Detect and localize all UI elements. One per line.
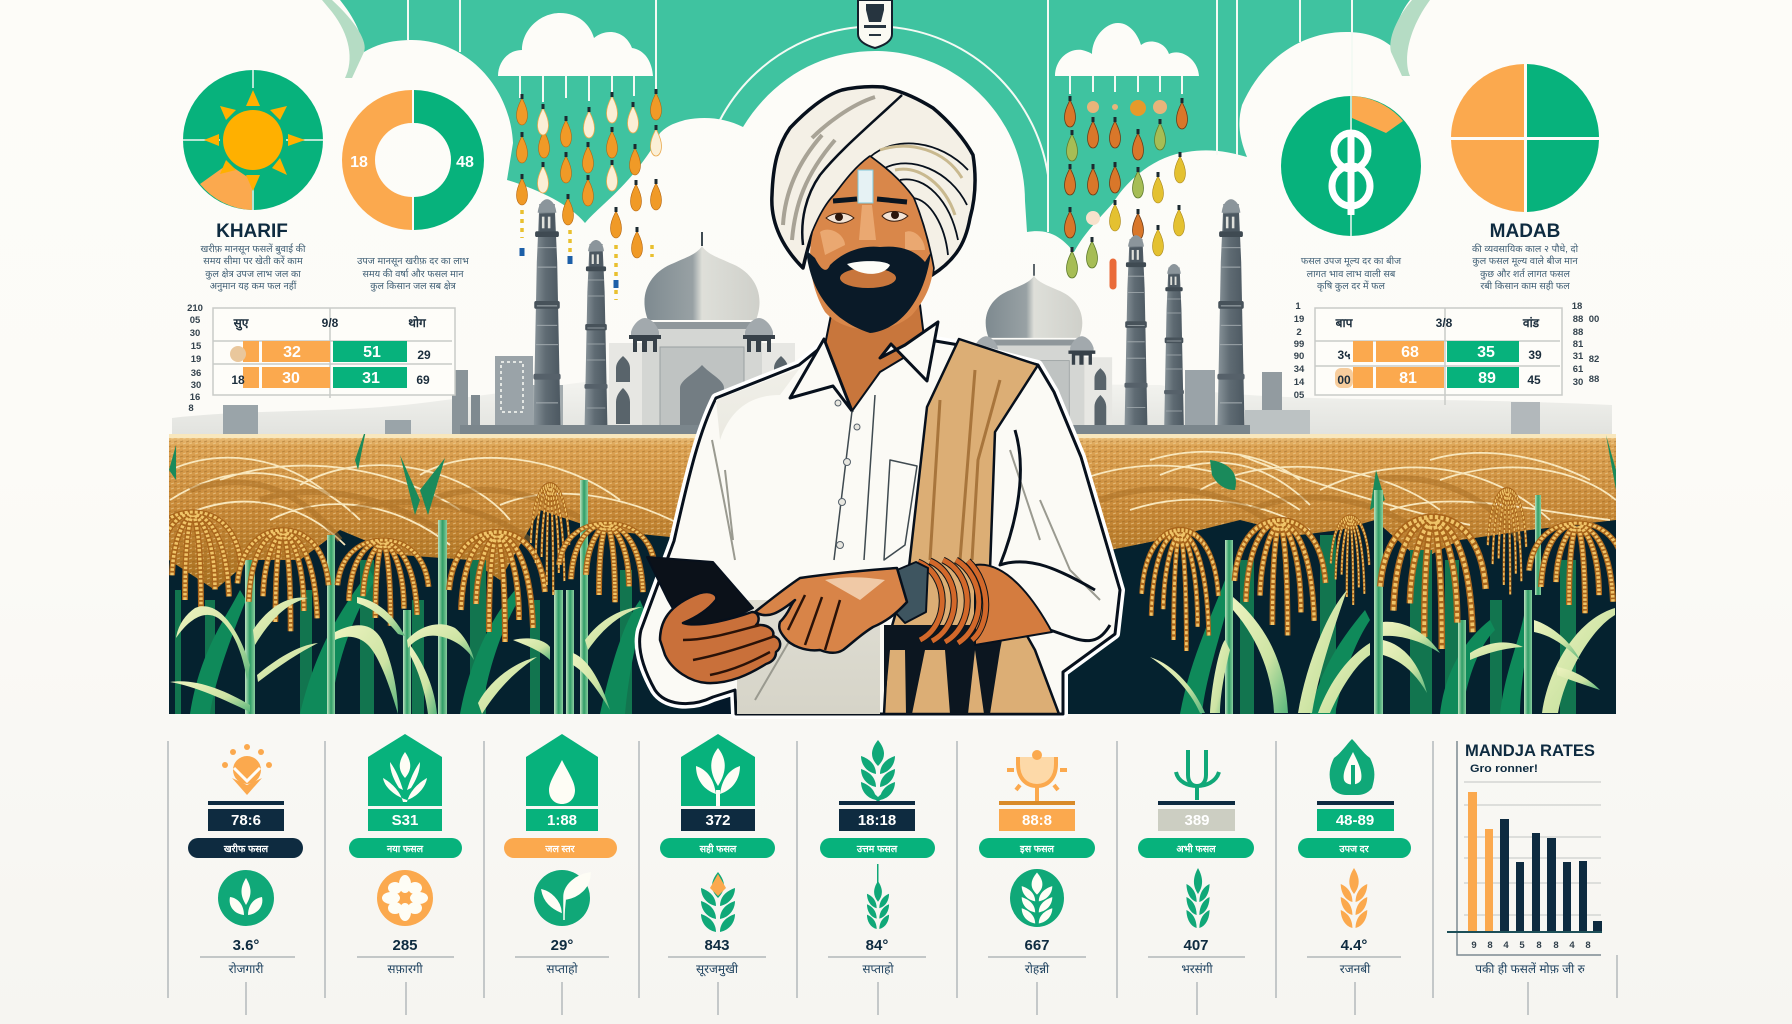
- right axis numbers: 05: [1294, 390, 1305, 401]
- stat column 5: 84°: [866, 937, 888, 954]
- beard and smile: [806, 247, 931, 333]
- text: Madab description: की व्यवसायिक काल २ पौधे, दो: [1472, 243, 1579, 255]
- chart caption: पकी ही फसलें मोफ़ जी रु: [1475, 962, 1586, 976]
- right axis numbers: 18: [1572, 301, 1582, 312]
- icon: green leaf sprig: [861, 740, 895, 802]
- right axis numbers: 99: [1294, 339, 1304, 350]
- right data table: 81: [1399, 370, 1417, 387]
- icon: sun: [204, 90, 305, 191]
- text: Madab description: [1472, 243, 1579, 292]
- icon: right Taj Mahal: [956, 264, 1112, 432]
- chart axis labels: 9: [1471, 940, 1477, 951]
- text: Madab description: कुल फसल मूल्य वाले बीज मान: [1472, 255, 1578, 267]
- golden frond arcs: [170, 452, 1616, 545]
- stat column 5: [820, 740, 935, 1015]
- eyebrows and eyes: [826, 199, 908, 223]
- chart bars: [1468, 792, 1602, 932]
- pale blade leaves right: [1150, 590, 1615, 713]
- text: dollar pie description: [1301, 255, 1402, 292]
- left data table: सुए: [233, 316, 250, 331]
- left axis numbers: 30: [191, 380, 201, 391]
- left data table: 51: [363, 344, 381, 361]
- stat column 6: 88:8: [1022, 812, 1052, 829]
- heading: mandi rates: MANDJA RATES: [1465, 741, 1595, 760]
- icon: water drop house: [526, 734, 598, 806]
- stat column 2: [349, 734, 462, 1015]
- donut chart: 18: [350, 154, 368, 171]
- stat column 2: 285: [392, 937, 418, 954]
- left axis numbers: 210: [187, 303, 203, 314]
- icon: rupee symbol: [1332, 133, 1370, 215]
- left axis numbers: 15: [191, 341, 202, 352]
- stat column 1: 78:6: [231, 812, 261, 829]
- wristwatch: [895, 562, 928, 623]
- left data table: 9/8: [322, 316, 339, 330]
- right axis numbers: 88: [1573, 327, 1583, 338]
- forehead tilak: [858, 170, 873, 203]
- tan shawl: [884, 339, 1059, 714]
- right axis numbers: 1: [1295, 301, 1301, 312]
- icon: flower badge: [377, 870, 433, 926]
- stat column 3: जल स्तर: [544, 844, 576, 855]
- stat column 8: रजनबी: [1340, 962, 1371, 976]
- left minarets: [533, 199, 608, 432]
- stat column 6: [979, 752, 1095, 1015]
- panel: farmer illustration: [640, 87, 1120, 714]
- stat column 7: [1138, 750, 1254, 1015]
- chart axis labels: [1471, 940, 1591, 951]
- right data table: 89: [1478, 370, 1496, 387]
- nose and cheek highlights: [820, 205, 925, 255]
- stat column 2: सफ़ारगी: [387, 962, 424, 976]
- right data table: 00: [1337, 373, 1351, 387]
- right axis numbers: 2: [1296, 327, 1302, 338]
- text: Kharif description: कुल क्षेत्र उपज लाभ जल का: [205, 268, 301, 280]
- text: Kharif description: समय सीमा पर खेती करें काम: [203, 255, 303, 267]
- stat column 8: उपज दर: [1338, 844, 1370, 855]
- text: Madab description: रबी किसान काम सही फल: [1480, 280, 1570, 292]
- farmer shirt: [640, 335, 1120, 714]
- right data table: 3/8: [1436, 316, 1453, 330]
- chart axis labels: 5: [1519, 940, 1525, 951]
- text: Madab description: कुछ और शर्त लागत फसल: [1480, 268, 1570, 280]
- right axis numbers: 82: [1589, 354, 1599, 365]
- right axis numbers: 14: [1294, 377, 1305, 388]
- text: dollar pie description: कृषि कुल दर में फल: [1317, 280, 1386, 292]
- chart axis labels: 8: [1536, 940, 1542, 951]
- shirt fold strokes: [712, 440, 1100, 700]
- stat column 3: 29°: [551, 937, 573, 954]
- right data table: 3५: [1338, 348, 1350, 362]
- shirt shading: [716, 368, 880, 714]
- left axis numbers: 05: [190, 315, 201, 326]
- stat column 4: [660, 734, 775, 1015]
- stat column 2: S31: [392, 812, 418, 829]
- left data table: 31: [362, 370, 380, 387]
- right data table: [1315, 308, 1562, 405]
- subheading: Gro ronner!: [1470, 763, 1538, 775]
- right data table: वांड: [1522, 316, 1540, 330]
- right hanging cloud: [1055, 23, 1199, 94]
- text: dollar pie description: लागत भाव लाभ वाली सब: [1307, 268, 1396, 280]
- left data table: 18: [231, 373, 245, 387]
- stat column 7: 407: [1183, 937, 1209, 954]
- icon: orange ear: [1341, 868, 1367, 928]
- left data table: 69: [416, 373, 430, 387]
- donut chart: [342, 90, 484, 230]
- left axis numbers: 8: [188, 403, 194, 414]
- icon: plant house: [368, 734, 442, 806]
- seeds hanging from left cloud: [516, 89, 662, 300]
- stat column 2: नया फसल: [386, 844, 424, 855]
- text: Kharif description: खरीफ़ मानसून फसलें बुवाई की: [201, 243, 306, 255]
- heading: Kharif: KHARIF: [216, 221, 288, 242]
- icon: green wheat: [867, 864, 889, 929]
- text: donut description: उपज मानसून खरीफ़ दर का लाभ: [357, 255, 469, 267]
- right minarets: [1124, 199, 1245, 432]
- right data table: 68: [1401, 344, 1419, 361]
- farmer neck: [825, 305, 925, 411]
- stat column 1: खरीफ फसल: [223, 843, 269, 855]
- right data table: 35: [1477, 344, 1495, 361]
- panel: mandi rates bar chart: [1447, 741, 1617, 1015]
- turban: [772, 87, 975, 275]
- text: Kharif description: [201, 243, 306, 292]
- icon: sprout badge: [534, 870, 590, 926]
- smartphone: [647, 557, 753, 640]
- chart axis labels: 8: [1487, 940, 1493, 951]
- seeds hanging from right cloud: [1064, 96, 1188, 286]
- icon: orange-tipped wheat: [701, 872, 735, 932]
- icon: state emblem: [858, 0, 892, 48]
- right axis numbers: 31: [1573, 351, 1584, 362]
- shirt sleeve fold: [1000, 430, 1110, 641]
- stat column 8: 48-89: [1336, 812, 1374, 829]
- donut chart: 48: [456, 154, 474, 171]
- text: donut description: [357, 255, 469, 292]
- stat column 8: [1298, 739, 1411, 1015]
- left axis numbers: 30: [190, 328, 200, 339]
- plant stems: [245, 480, 1541, 714]
- quarter pie chart: [1451, 64, 1599, 212]
- panel: crop field: [145, 425, 1625, 714]
- right axis numbers: 90: [1294, 351, 1304, 362]
- right axis numbers: 88: [1573, 314, 1583, 325]
- top teal sky band: [322, 0, 1430, 252]
- chart axis labels: 8: [1585, 940, 1591, 951]
- text: Kharif description: अनुमान यह कम फल नहीं: [210, 280, 297, 292]
- stat column 8: 4.4°: [1341, 937, 1367, 954]
- stat column 4: सही फसल: [699, 843, 737, 855]
- pale blade leaves left: [170, 597, 642, 714]
- right axis numbers: 30: [1573, 377, 1583, 388]
- stat column 4: सूरजमुखी: [696, 962, 739, 977]
- left data table: 32: [283, 344, 301, 361]
- white halo behind farmer: [640, 335, 1120, 714]
- stat column 7: भरसंगी: [1181, 962, 1214, 976]
- icon: sun grain: [222, 744, 272, 795]
- right axis numbers: 19: [1294, 314, 1304, 325]
- chart axis labels: 4: [1503, 940, 1509, 951]
- stat column 3: [504, 734, 617, 1015]
- left hanging cloud: [498, 13, 653, 102]
- turban folds: [783, 95, 968, 255]
- heading: Madab: MADAB: [1490, 221, 1560, 242]
- dollar pie chart: [1281, 96, 1421, 236]
- stat column 6: 667: [1024, 937, 1050, 954]
- left axis numbers: 19: [191, 354, 201, 365]
- icon: orange sun sprout: [1007, 752, 1067, 802]
- right axis numbers: 34: [1294, 364, 1305, 375]
- left data table: थोग: [408, 316, 427, 330]
- icon: lotus house: [681, 734, 755, 806]
- column dividers: [168, 741, 1433, 998]
- stat column 5: 18:18: [858, 812, 896, 829]
- text: donut description: समय की वर्षा और फसल मान: [362, 268, 464, 280]
- left axis numbers: 36: [191, 368, 201, 379]
- pointing hand with fingers: [755, 568, 907, 653]
- farmer forearm: [975, 565, 1052, 645]
- orange bangles: [918, 560, 986, 643]
- top leaf tips: [169, 425, 1616, 515]
- left axis numbers: 16: [190, 392, 200, 403]
- millet panicles: [145, 485, 1625, 651]
- stat column 5: उत्तम फसल: [856, 844, 898, 855]
- shirt collar: [790, 322, 938, 411]
- icon: wheat badge: [1010, 869, 1064, 927]
- right axis numbers: [1294, 301, 1599, 401]
- stat column 4: 372: [705, 812, 731, 829]
- right axis numbers: 88: [1589, 374, 1599, 385]
- stat column 6: इस फसल: [1019, 844, 1055, 855]
- text: donut description: कुल किसान जल सब क्षेत्र: [370, 280, 457, 292]
- stat column 1: [188, 744, 303, 1015]
- stat column 4: 843: [704, 937, 730, 954]
- stat column 6: रोहन्नी: [1025, 962, 1050, 976]
- shirt placket and buttons: [834, 395, 917, 560]
- dark foliage beneath the grain: [169, 510, 1616, 714]
- chart axis labels: 8: [1553, 940, 1559, 951]
- right axis numbers: 61: [1573, 364, 1584, 375]
- icon: ornate green drop: [1330, 739, 1374, 795]
- stat column 7: अभी फसल: [1176, 843, 1216, 855]
- stat column 3: सप्ताहो: [546, 962, 579, 976]
- face: [810, 157, 933, 330]
- ground fence: [460, 425, 1250, 434]
- icon: green trident sprout: [1176, 750, 1219, 800]
- right axis numbers: 81: [1573, 339, 1584, 350]
- left data table: [213, 308, 455, 398]
- icon: green ear: [1186, 868, 1210, 928]
- right data table: 39: [1528, 348, 1542, 362]
- hazy skyline: [172, 356, 1612, 434]
- right data table: बाप: [1335, 316, 1354, 330]
- lower shawl shadow stripes: [884, 625, 1005, 714]
- stat column 1: रोजगारी: [229, 962, 264, 976]
- left data table: 29: [417, 348, 431, 362]
- shawl folds: [930, 370, 1000, 560]
- icon: left Taj Mahal: [609, 232, 795, 432]
- left hand with fingers: [660, 592, 780, 683]
- sun pie chart: [183, 70, 323, 210]
- left axis numbers: [187, 303, 203, 414]
- text: dollar pie description: फसल उपज मूल्य दर का बीज: [1301, 255, 1402, 267]
- chart axis labels: 4: [1569, 940, 1575, 951]
- stat column 1: 3.6°: [233, 937, 259, 954]
- left data table: 30: [282, 370, 300, 387]
- stat column 5: सप्ताहो: [862, 962, 895, 976]
- stat column 7: 389: [1184, 812, 1210, 829]
- icon: leaf badge: [218, 870, 274, 926]
- stat column 3: 1:88: [547, 812, 577, 829]
- right data table: 45: [1527, 373, 1541, 387]
- right axis numbers: 00: [1589, 314, 1599, 325]
